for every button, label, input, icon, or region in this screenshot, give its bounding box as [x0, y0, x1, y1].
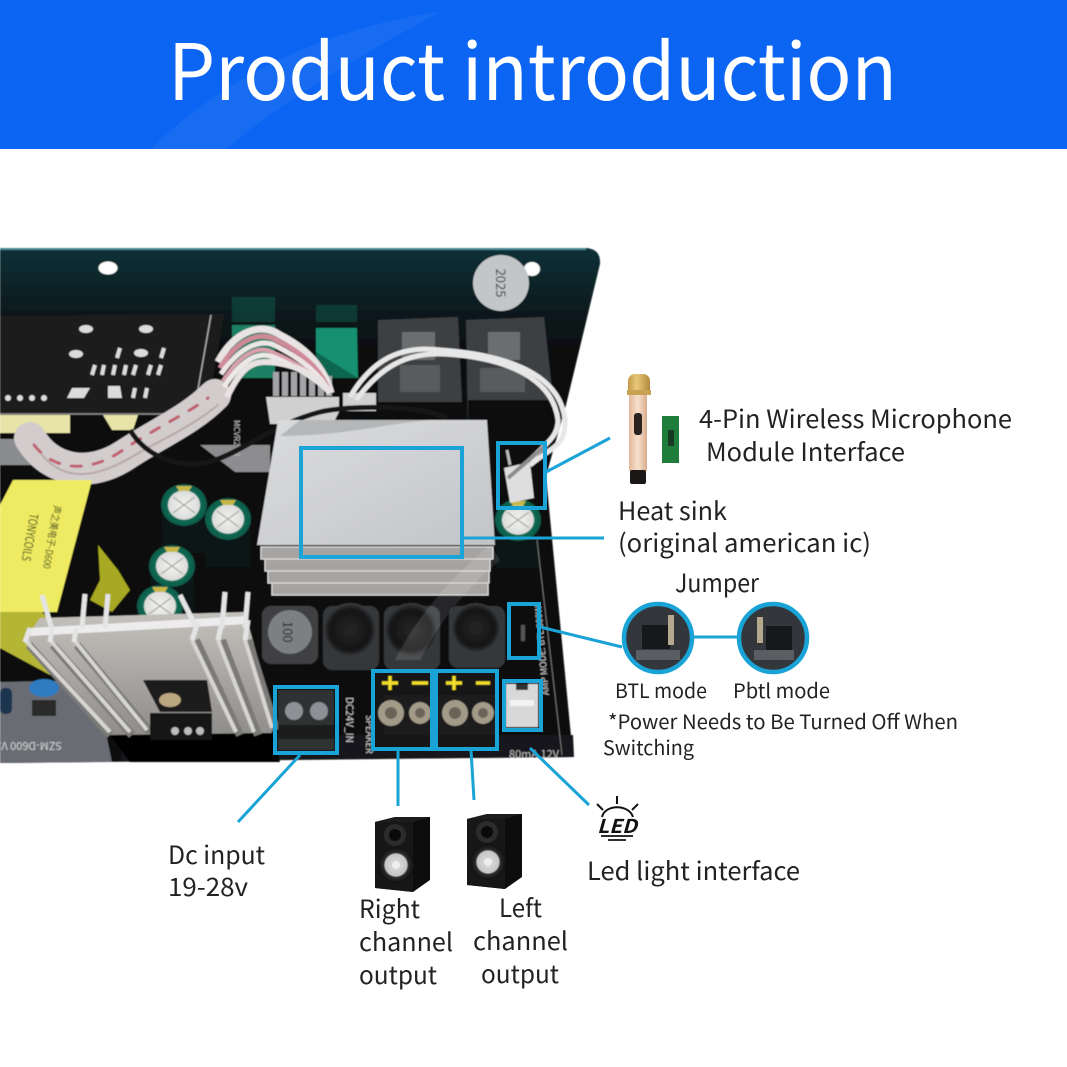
microphone label — [699, 400, 1012, 469]
date sticker — [473, 255, 529, 311]
left channel label — [473, 889, 568, 991]
black cable — [130, 407, 447, 464]
DC input label: Dc input — [168, 836, 266, 872]
jumper mode labels: BTL mode — [615, 675, 707, 704]
icon: LED light: LED — [597, 812, 640, 839]
top edge highlight — [0, 248, 586, 250]
watermark swoosh over inductors — [395, 545, 500, 660]
MCU board silk: MCVR2 V3 — [231, 420, 242, 457]
heat sink label: Heat sink — [618, 492, 727, 528]
right channel label: channel — [359, 923, 453, 959]
inductors: 100 — [279, 621, 298, 643]
LED light label: Led light interface — [587, 852, 800, 888]
DC input label — [168, 836, 266, 904]
right channel label — [359, 890, 453, 992]
silk text: 80mA 12V — [509, 746, 560, 762]
plate reflection — [280, 420, 428, 436]
left channel label: output — [481, 955, 560, 991]
left channel label: Left — [499, 889, 543, 925]
small heat sink — [25, 592, 280, 762]
date sticker: 2025 — [492, 269, 511, 297]
icon: wireless microphone — [627, 374, 651, 484]
icon: left speaker — [467, 814, 522, 889]
power warning note: Switching — [603, 732, 694, 761]
blue capacitor — [29, 679, 59, 697]
silk text: AMP MODE: BTL 300W — [531, 605, 552, 696]
power warning note: *Power Needs to Be Turned Off When — [608, 706, 958, 735]
back panel and PCB silhouette — [0, 248, 600, 763]
callout box: LED — [504, 681, 541, 730]
heat sink label: (original american ic) — [618, 524, 871, 560]
callout box: jumper — [509, 604, 539, 658]
mounting holes — [98, 262, 540, 276]
transformer: TONYCOILS — [18, 512, 43, 563]
title: Product introduction — [168, 11, 897, 123]
header banner — [0, 0, 1067, 150]
callout box: DC input — [275, 687, 337, 753]
silk text: SPEAKER — [363, 715, 376, 754]
upper ribbon cable arcs — [218, 329, 331, 397]
microphone connector — [504, 446, 545, 503]
grey PCB area — [0, 680, 112, 763]
PCB floor — [0, 415, 573, 757]
callout box: heat sink — [301, 448, 462, 557]
annotation boxes and leader lines — [238, 438, 738, 822]
transformer — [0, 480, 130, 675]
callout box: left speaker — [436, 671, 497, 749]
bottom right PCB strip — [120, 735, 574, 761]
inductors — [262, 603, 505, 670]
PCB white rail — [537, 540, 562, 755]
relays — [378, 317, 553, 440]
jumper photo: PBTL mode — [739, 604, 807, 672]
grey ribbon under heat sink — [200, 445, 270, 472]
green components — [232, 297, 358, 378]
left channel label: channel — [473, 922, 568, 958]
callout box: right speaker — [373, 671, 432, 749]
icon: receiver module — [662, 416, 679, 463]
jumper photo: BTL mode — [624, 604, 692, 672]
white wires — [350, 349, 565, 465]
DC input label: 19-28v — [168, 868, 248, 904]
power warning note — [603, 706, 958, 761]
callout box: microphone interface — [498, 443, 545, 508]
jumper heading: Jumper — [675, 564, 759, 600]
microphone label: Module Interface — [706, 433, 905, 469]
small PCB daughterboard — [0, 314, 224, 414]
heat sink fins — [261, 547, 493, 595]
jumper mode labels — [615, 675, 830, 704]
amplifier board photo — [0, 248, 600, 763]
icon: LED light — [597, 796, 640, 840]
silk text — [343, 605, 560, 762]
electrolytic capacitors — [137, 484, 541, 654]
lower ribbon cable — [0, 395, 218, 474]
heat sink top plate — [257, 420, 495, 545]
right channel label: output — [359, 956, 438, 992]
LED connector — [506, 684, 538, 727]
right channel label: Right — [359, 890, 421, 926]
DC terminal — [278, 690, 334, 750]
transformer: 声之美电子-D600 — [40, 504, 66, 570]
heat sink label — [618, 492, 871, 560]
jumper — [512, 617, 534, 653]
silk text: DC24V_IN — [343, 697, 358, 743]
leader lines — [238, 438, 738, 822]
jumper mode labels: Pbtl mode — [733, 675, 830, 704]
speaker terminals — [375, 673, 496, 748]
grey PCB parts — [0, 688, 62, 754]
watermark swoosh — [150, 12, 440, 150]
yellow connector blocks — [0, 415, 138, 433]
white connectors — [266, 393, 376, 424]
icon: right speaker — [375, 817, 430, 892]
microphone label: 4-Pin Wireless Microphone — [699, 400, 1012, 436]
